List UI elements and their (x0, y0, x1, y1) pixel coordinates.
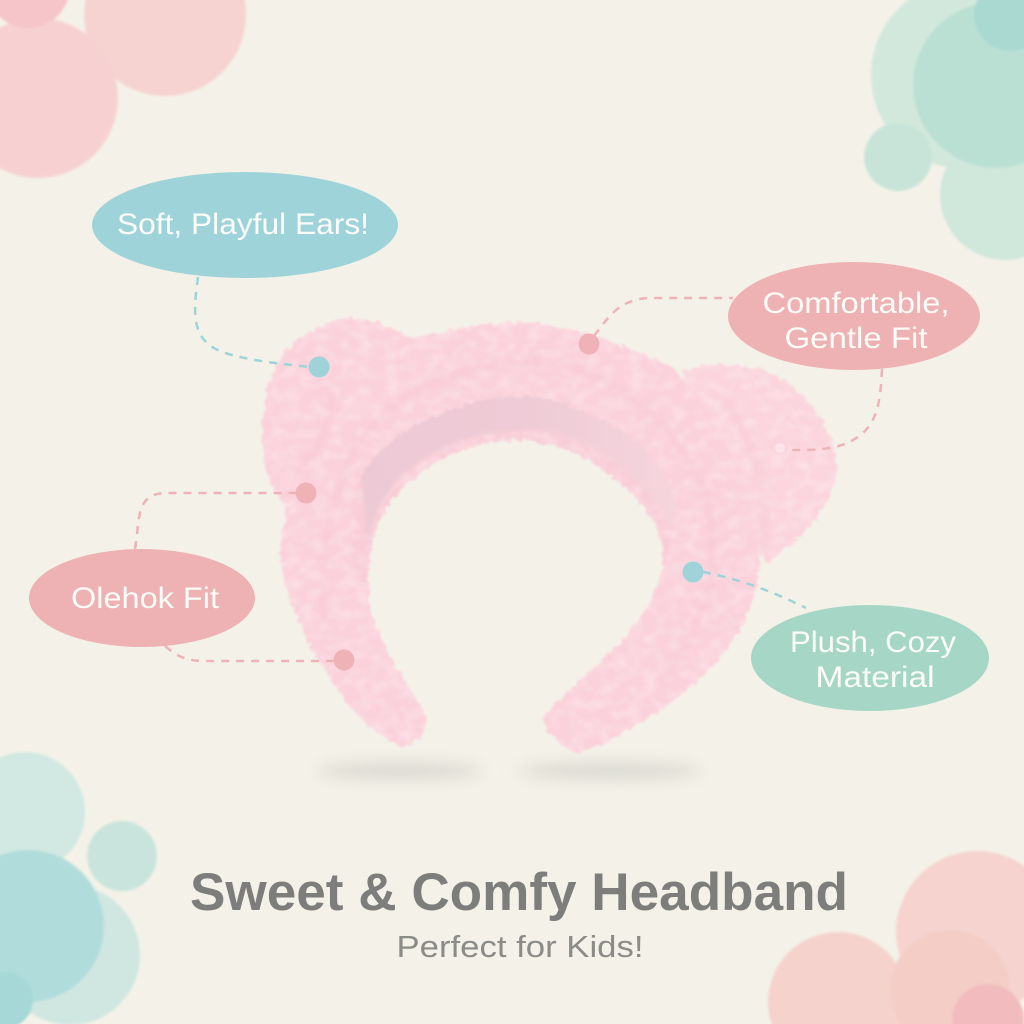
connector: fit callout to left side (135, 493, 296, 549)
callout dot: band top (578, 334, 600, 354)
right ear (682, 364, 836, 563)
fur seam shading (295, 362, 765, 680)
callout: Plush, Cozy Material: Plush, Cozy (790, 626, 956, 659)
callout: Comfortable, Gentle Fit: Comfortable, (762, 287, 950, 320)
callout dot: lower left (334, 650, 354, 670)
callout dot: right ear faint (775, 443, 785, 453)
callout: Soft, Playful Ears: Soft, Playful Ears! (117, 208, 369, 241)
main band (281, 322, 760, 753)
decoration: bottom-left teal bubbles (0, 752, 157, 1024)
decoration: top-right green bubbles (864, 0, 1024, 260)
headband illustration (262, 318, 836, 753)
callout: Soft, Playful Ears (92, 172, 398, 278)
connector: ears callout (195, 277, 309, 367)
headband floor shadows (316, 763, 702, 779)
inner fluffy lining (320, 380, 690, 640)
callout: Comfortable, Gentle Fit: Gentle Fit (784, 322, 928, 355)
callout dot: right side (682, 562, 704, 582)
callout dot: ear (308, 356, 330, 378)
callout: Plush, Cozy Material (751, 605, 989, 711)
callout dot: left side (296, 482, 316, 504)
inner strap (360, 385, 690, 545)
callout: Comfortable, Gentle Fit (728, 262, 980, 370)
title: Sweet & Comfy Headband (190, 863, 848, 922)
connector: fit callout to lower left (165, 646, 334, 661)
left ear (262, 318, 420, 505)
callout: Plush, Cozy Material: Material (816, 661, 934, 694)
decoration: bottom-right pink bubbles (768, 851, 1024, 1024)
callout: Olehok Fit: Olehok Fit (71, 582, 220, 615)
connector: comfortable callout to band (594, 298, 733, 336)
connector: plush callout (703, 572, 806, 608)
decoration: top-left pink bubbles (0, 0, 246, 178)
callout: Olehok Fit (29, 549, 255, 647)
connector: comfortable callout to right ear (785, 369, 882, 450)
subtitle: Perfect for Kids! (396, 929, 644, 964)
